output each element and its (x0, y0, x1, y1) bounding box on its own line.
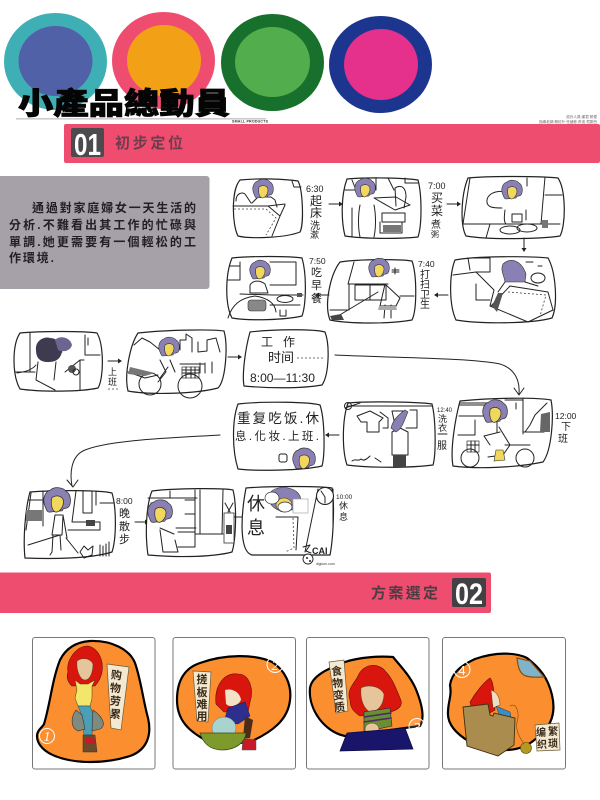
comic panel: 7:50 breakfast: 早 (311, 279, 322, 292)
comic panel: 7:50 breakfast: 餐 (311, 291, 322, 305)
comic panel: 8:00 evening walk: 晚 (119, 507, 130, 520)
sign (329, 660, 348, 714)
subtitle rule and english label: SMALL PRODUCTS (232, 120, 269, 124)
comic panel: 8:00 evening walk: 散 (119, 519, 130, 533)
comic panel: 12:40 laundry: 服 (437, 440, 447, 452)
comic panel: 6:30 wake up: 6:30 (306, 184, 324, 194)
arrow (325, 432, 339, 438)
sign: 板 (196, 685, 208, 699)
figure (340, 665, 413, 751)
circle: dark green and green (221, 14, 324, 111)
comic panel: 6:30 wake up: 漱 (310, 230, 319, 240)
sign: 琐 (548, 737, 558, 750)
comic panel: 7:40 cleaning: 打 (420, 268, 430, 281)
comic panel: 7:40 cleaning (328, 258, 435, 323)
arrow (329, 202, 343, 206)
comic panel: 8:00 evening walk: 步 (119, 533, 130, 546)
comic panel: 7:00 buy food (342, 178, 446, 239)
comic panel: 10:00 rest: 休 (247, 494, 265, 514)
comic panel: cycling to work (127, 330, 226, 398)
comic panel: 7:40 cleaning: 生 (420, 298, 430, 311)
comic panel: 7:50 breakfast: 7:50 (309, 256, 326, 266)
comic panel: repeated routine (234, 402, 324, 470)
comic panel: 6:30 wake up: 起 (310, 194, 322, 208)
intro text panel (0, 176, 210, 289)
comic panel: working hours: 8:00—11:30 (250, 371, 315, 385)
comic panel: 12:00 cycling home (452, 398, 577, 468)
sign: 累 (109, 707, 122, 722)
sign: 质 (334, 700, 346, 714)
orange blob (177, 656, 290, 745)
section banner 02 (0, 572, 491, 613)
arrow: go to work: 上 (108, 367, 117, 377)
comic panel: 7:00 buy food: 7:00 (428, 181, 446, 191)
sign: 物 (109, 680, 122, 696)
sign: 食 (331, 664, 343, 678)
number 2: 2 (272, 659, 278, 674)
sign: 搓 (196, 672, 208, 686)
section banner 01 (64, 124, 600, 163)
comic panel: 10:00 rest (242, 486, 353, 555)
comic panel: 7:40 cleaning: 卫 (420, 290, 430, 301)
comic panel: 7:00 buy food: 买 (431, 191, 443, 205)
figure in armchair (463, 678, 532, 756)
comic panel: 10:00 rest: 息 (247, 518, 265, 538)
comic panel: 7:50 breakfast (227, 256, 326, 320)
sign: 购 (110, 667, 123, 683)
arrow (135, 520, 149, 524)
comic panel: 6:30 wake up: 洗 (310, 220, 320, 232)
comic panel: 7:00 buy food: 粥 (431, 229, 439, 239)
arrow: go to work (108, 358, 122, 389)
comic panel: 10:00 rest: 息 (339, 511, 348, 522)
credits (539, 114, 597, 124)
long arrow: to afternoon (67, 435, 220, 487)
arrow: go to work: 班 (108, 376, 117, 387)
comic panel: 12:40 laundry: 衣 (438, 422, 447, 433)
arrow (447, 202, 461, 206)
comic panel: watching television (146, 489, 236, 557)
comic panel: 7:00 buy food: 煮 (431, 219, 441, 231)
card 2: washing (173, 638, 296, 769)
comic panel: 7:40 cleaning: 7:40 (418, 259, 435, 269)
comic panel: 10:00 rest: 休 (339, 500, 348, 511)
comic panel: 8:00 evening walk (24, 488, 133, 558)
comic panel: 6:30 wake up: 床 (310, 206, 322, 220)
title: 小產品總動員 (18, 87, 230, 121)
comic panel: working hours (243, 330, 328, 388)
intro text panel: 作環境. (9, 250, 54, 265)
logo: cai (303, 545, 335, 566)
comic panel: repeated routine: 息.化妆.上班. (235, 429, 319, 443)
comic panel: working hours: 作 (283, 335, 295, 349)
badge 02: 02 (455, 578, 483, 611)
comic panel: 8:00 evening walk: 8:00 (116, 496, 133, 506)
comic panel: 12:40 laundry (343, 402, 453, 467)
card 4: knitting (442, 638, 566, 769)
comic panel: 6:30 wake up (233, 179, 324, 240)
sign: 织 (537, 738, 547, 751)
intro text panel: 單調.她更需要有一個輕松的工 (9, 234, 196, 249)
orange blob (310, 657, 423, 736)
circle: navy and magenta (329, 16, 432, 113)
comic panel: 12:00 cycling home: 下 (561, 422, 571, 433)
comic panel: repeated routine: 重复吃饭.休 (237, 410, 320, 426)
orange blob (448, 654, 554, 750)
sign: 变 (333, 688, 345, 702)
number 4: 4 (458, 663, 466, 678)
sign: 劳 (109, 693, 122, 709)
arrow (522, 238, 526, 252)
arrow (228, 354, 242, 360)
orange blob (37, 641, 149, 762)
comic panel: 7:40 cleaning: 扫 (420, 278, 430, 291)
number 3: 3 (412, 721, 420, 736)
comic panel: 12:40 laundry: 12:40 (437, 408, 453, 414)
card 3: food (306, 638, 429, 769)
sign: 繁 (548, 725, 558, 738)
arrow (234, 514, 248, 520)
credits: 指導老師:蔡紅叶 任緒彬 許波 賀慶西 (539, 119, 597, 124)
sign (535, 723, 560, 751)
comic panel: working hours: 工 (261, 335, 273, 349)
comic panel: working hours: 时间 (268, 350, 294, 365)
intro text panel: 通過對家庭婦女一天生活的 (32, 200, 196, 215)
logo: cai: CAI (312, 546, 328, 556)
comic panel: 7:00 buy food: 菜 (431, 204, 443, 218)
comic panel: 10:00 rest: 10:00 (336, 494, 353, 501)
comic panel: cooking breakfast (462, 176, 564, 239)
sign (107, 664, 129, 730)
number 1: 1 (44, 730, 50, 745)
circle: teal and indigo (4, 13, 107, 110)
logo: cai: digicon.com (316, 562, 335, 566)
circle: pink and orange (112, 12, 215, 109)
badge 01: 01 (74, 127, 101, 162)
comic panel: 12:00 cycling home: 班 (558, 433, 568, 445)
intro text panel: 分析.不難看出其工作的忙碌與 (9, 217, 196, 232)
comic panel: 7:50 breakfast: 吃 (311, 266, 322, 279)
figure (200, 674, 256, 750)
card 1: shopping (32, 638, 155, 769)
sign: 用 (196, 710, 208, 723)
comic panel: tidying the bed (451, 257, 555, 323)
sign: 难 (196, 697, 208, 711)
credits: 設計人員:謝君 蔡偉 (566, 114, 597, 119)
arrow (434, 292, 448, 298)
sign: 编 (536, 726, 546, 739)
long arrow: to noon (335, 355, 524, 395)
tv on wall (517, 658, 544, 677)
figure (67, 646, 103, 752)
sign: 物 (332, 676, 344, 690)
comic panel: 12:00 cycling home: 12:00 (555, 411, 577, 421)
sign (193, 671, 211, 723)
comic panel: washing face (14, 332, 102, 391)
section heading: 方案選定 (371, 584, 438, 602)
comic panel: 12:40 laundry: 洗 (438, 413, 447, 424)
section heading: 初步定位 (115, 134, 183, 152)
arrow (315, 292, 329, 298)
